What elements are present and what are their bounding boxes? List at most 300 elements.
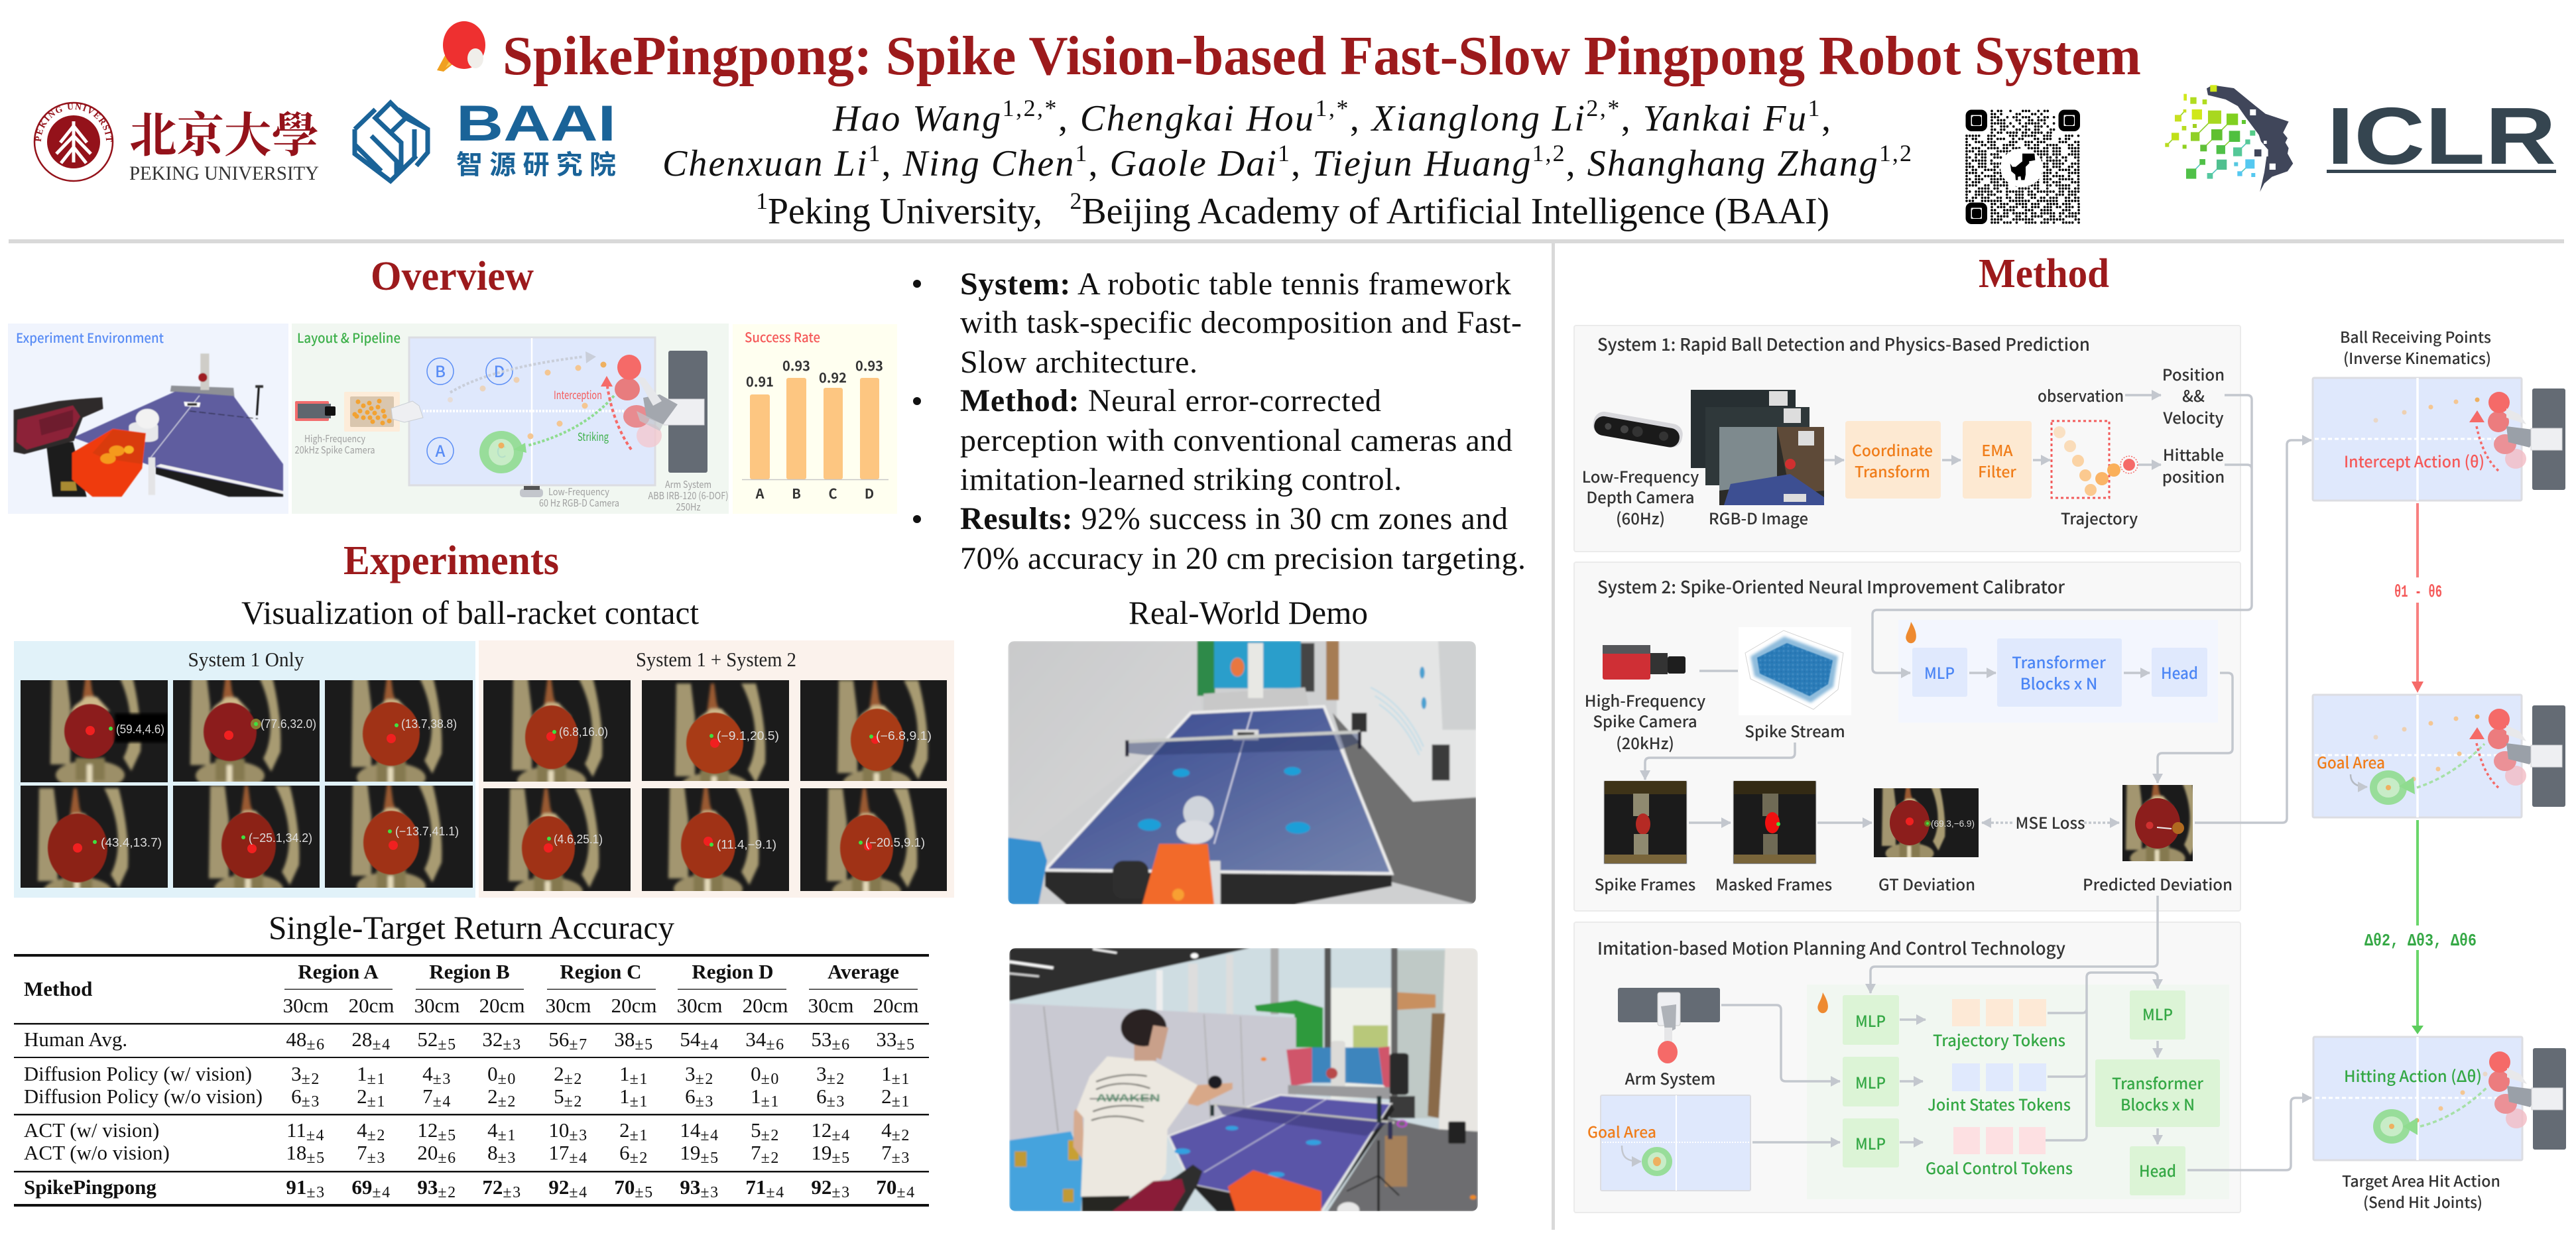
- MSE loss: MSE Loss: [2015, 810, 2085, 833]
- row: Diffusion Policy w/ vision: 1: [881, 1062, 892, 1085]
- row: Diffusion Policy w/ vision: 1: [357, 1062, 367, 1085]
- row: ACT w/ vision: [24, 1118, 910, 1144]
- heading: Real-World Demo: Real-World Demo: [1129, 594, 1368, 631]
- box: coordinate transform: Coordinate: [1852, 438, 1933, 461]
- authors: ,: [1350, 98, 1370, 139]
- row: ACT w/ vision: 10: [548, 1118, 569, 1142]
- row: ACT w/ vision: 4: [357, 1118, 367, 1142]
- system 2 labels: (20kHz): [1616, 731, 1674, 754]
- label: target area hit action: [2342, 1169, 2500, 1213]
- panel: experiment environment: Experiment Environment: [16, 328, 164, 347]
- box: EMA filter: [1963, 421, 2032, 499]
- panel: success rate bar chart: [733, 324, 897, 514]
- layout labels: 250Hz: [676, 500, 700, 514]
- trajectory: Trajectory: [2061, 506, 2138, 529]
- row: SpikePingpong: ±3: [306, 1184, 326, 1201]
- masked frames: [1733, 781, 1816, 864]
- frame labels: Spike Frames: [1595, 872, 1695, 895]
- row: Diffusion Policy w/ vision: Diffusion Policy (w/ vision): [24, 1062, 252, 1085]
- row: Diffusion Policy w/o vision: ±1: [892, 1093, 910, 1110]
- authors: Chengkai Hou: [1080, 98, 1314, 139]
- predicted deviation: [2122, 776, 2198, 870]
- panel: hitting action: [2313, 1037, 2566, 1160]
- row: SpikePingpong: 92: [811, 1175, 831, 1199]
- layout labels: Arm System: [665, 477, 711, 491]
- contact image 10: [483, 788, 631, 906]
- authors: [662, 95, 1912, 184]
- table header: Method: [24, 977, 92, 1000]
- trainable green block: Head: [2139, 1158, 2176, 1181]
- row: Diffusion Policy w/ vision: [24, 1062, 910, 1088]
- contact image 8: (−9.1,20.5): [717, 729, 779, 743]
- spike stream cube: [1739, 627, 1851, 715]
- row: Human Avg.: ±6: [306, 1036, 326, 1053]
- row: Diffusion Policy w/ vision: ±1: [367, 1071, 386, 1088]
- contact image 1: [21, 672, 168, 790]
- trainable network block: Transformer: [2012, 650, 2106, 673]
- affiliations: Beijing Academy of Artificial Intelligence (BAAI): [1081, 191, 1829, 232]
- table header: 20cm: [611, 994, 656, 1017]
- contact image 4: (43.4,13.7): [101, 836, 162, 849]
- box: EMA filter: Filter: [1978, 459, 2016, 482]
- authors: Yankai Fu: [1643, 98, 1806, 139]
- row: ACT w/o vision: ±3: [367, 1150, 386, 1167]
- row: ACT w/o vision: 18: [286, 1141, 306, 1164]
- row: ACT w/ vision: 12: [417, 1118, 438, 1142]
- connectors: [1645, 671, 2233, 783]
- layout labels: High-Frequency: [304, 432, 365, 446]
- table header: Region C: [560, 960, 642, 983]
- contact image 2: (77.6,32.0): [261, 717, 316, 731]
- photo: person playing: AWAKEN: [1096, 1093, 1160, 1104]
- table header: 30cm: [283, 994, 328, 1017]
- row: Diffusion Policy w/ vision: 3: [816, 1062, 827, 1085]
- icon: depth camera: [1591, 410, 1684, 449]
- row: Diffusion Policy w/o vision: ±3: [827, 1093, 845, 1110]
- system 2 labels: [1585, 688, 1845, 754]
- row: Human Avg.: ±3: [503, 1036, 522, 1053]
- layout labels: Striking: [578, 428, 609, 444]
- icon: ping pong paddle: [437, 21, 485, 72]
- results table: [14, 954, 929, 1207]
- outputs: [2038, 362, 2225, 487]
- row: Diffusion Policy w/o vision: ±2: [498, 1093, 517, 1110]
- row: SpikePingpong: ±4: [372, 1184, 391, 1201]
- connectors: [1721, 896, 2158, 1142]
- row: ACT w/o vision: ±3: [892, 1150, 910, 1167]
- trajectory: [2052, 421, 2138, 529]
- row: Diffusion Policy w/o vision: 7: [422, 1085, 433, 1108]
- row: Diffusion Policy w/ vision: ±3: [433, 1071, 452, 1088]
- subheading: visualization: Visualization of ball-racket contact: [241, 594, 699, 631]
- goal area diagram: [1587, 1095, 1750, 1191]
- row: Diffusion Policy w/o vision: 1: [751, 1085, 761, 1108]
- trainable green block: [1807, 973, 2229, 1199]
- row: SpikePingpong: 69: [351, 1175, 372, 1199]
- panel: imitation-based motion planning: Imitation-based Motion Planning And Control Technology: [1597, 935, 2065, 960]
- contact image 3: [325, 674, 473, 792]
- label: ball receiving points: Ball Receiving Points: [2340, 325, 2491, 347]
- row: Human Avg.: [24, 1028, 916, 1053]
- row: Diffusion Policy w/ vision: ±2: [302, 1071, 320, 1088]
- affiliations: Peking University,: [768, 191, 1070, 232]
- row: Human Avg.: ±7: [569, 1036, 588, 1053]
- row: SpikePingpong: ±2: [438, 1184, 457, 1201]
- row: ACT w/o vision: 19: [680, 1141, 700, 1164]
- row: Diffusion Policy w/o vision: 2: [487, 1085, 498, 1108]
- frame labels: Predicted Deviation: [2083, 872, 2233, 895]
- arrow: delta thetas: Δθ2, Δθ3, Δθ6: [2364, 931, 2477, 951]
- row: SpikePingpong: 72: [482, 1175, 503, 1199]
- outputs: &&: [2182, 383, 2205, 406]
- arm system icon: Arm System: [1625, 1066, 1715, 1089]
- frame arrows: [1689, 821, 1872, 824]
- row: Human Avg.: 48: [286, 1028, 306, 1051]
- row: ACT w/ vision: ±1: [630, 1127, 648, 1144]
- column divider: [1552, 243, 1555, 1230]
- label: ball receiving points: [2340, 325, 2491, 369]
- row: ACT w/ vision: ±4: [831, 1127, 851, 1144]
- panel: System 1 + System 2: [479, 640, 954, 906]
- row: Human Avg.: ±6: [766, 1036, 785, 1053]
- row: Diffusion Policy w/o vision: ±4: [433, 1093, 452, 1110]
- table header: 30cm: [677, 994, 722, 1017]
- authors: ,: [882, 143, 902, 184]
- row: ACT w/ vision: 14: [680, 1118, 700, 1142]
- row: Diffusion Policy w/o vision: Diffusion Policy (w/o vision): [24, 1085, 263, 1108]
- row: Diffusion Policy w/ vision: 2: [554, 1062, 564, 1085]
- row: ACT w/o vision: ±2: [761, 1150, 780, 1167]
- outputs: observation: [2038, 383, 2124, 406]
- panel: success rate bar chart: B: [792, 483, 801, 503]
- table header: Region D: [692, 960, 774, 983]
- heading: Method: Method: [1979, 251, 2109, 296]
- contact image 8: [642, 680, 789, 802]
- contact image 11: [642, 786, 789, 904]
- panel: success rate bar chart: 0.92: [819, 367, 847, 387]
- layout labels: ABB IRB-120 (6-DOF): [648, 489, 728, 503]
- GT deviation: (69.3,−6.9): [1931, 818, 1975, 829]
- row: Diffusion Policy w/o vision: 2: [881, 1085, 892, 1108]
- QR code: [1967, 111, 2079, 223]
- panel: success rate bar chart: A: [755, 483, 765, 503]
- panel: goal area: [2313, 695, 2565, 817]
- summary bullets: Results: 92% success in 30 cm zones and: [960, 501, 1508, 536]
- system 2 labels: Spike Camera: [1593, 709, 1697, 732]
- row: SpikePingpong: ±3: [831, 1184, 851, 1201]
- row: SpikePingpong: 70: [614, 1175, 635, 1199]
- authors: ,: [1566, 143, 1586, 184]
- row: ACT w/o vision: ±4: [569, 1150, 588, 1167]
- row: ACT w/o vision: ±6: [438, 1150, 457, 1167]
- row: ACT w/o vision: 7: [357, 1141, 367, 1164]
- row: ACT w/ vision: 4: [487, 1118, 498, 1142]
- camera labels: Low-Frequency: [1582, 464, 1699, 487]
- table header: Region B: [429, 960, 510, 983]
- logo: BAAI: 智源研究院: [456, 143, 616, 182]
- panel: goal area: Goal Area: [2317, 750, 2385, 773]
- authors: 1,2: [1532, 140, 1565, 166]
- table header: 20cm: [479, 994, 524, 1017]
- panel: success rate bar chart: 0.91: [746, 371, 774, 390]
- row: Diffusion Policy w/o vision: 2: [357, 1085, 367, 1108]
- row: ACT w/o vision: 7: [751, 1141, 761, 1164]
- authors: 1,2,*: [1003, 95, 1057, 121]
- row: SpikePingpong: [24, 1175, 916, 1201]
- table diagram: [409, 337, 655, 485]
- label: target area hit action: (Send Hit Joints): [2363, 1190, 2483, 1213]
- row: Diffusion Policy w/ vision: 3: [291, 1062, 302, 1085]
- RGB-D image stack: [1691, 390, 1824, 505]
- row: Human Avg.: Human Avg.: [24, 1028, 127, 1051]
- row: Diffusion Policy w/o vision: 6: [816, 1085, 827, 1108]
- frame labels: GT Deviation: [1878, 872, 1975, 895]
- panel: success rate bar chart: C: [828, 483, 837, 503]
- row: Diffusion Policy w/ vision: 0: [751, 1062, 761, 1085]
- row: ACT w/ vision: ±1: [498, 1127, 517, 1144]
- trainable green block: MLP: [2142, 1002, 2173, 1025]
- arrows: [1824, 395, 2161, 465]
- row: ACT w/o vision: [24, 1141, 910, 1167]
- table header: 30cm: [546, 994, 591, 1017]
- panel: System 1: [1574, 326, 2240, 552]
- row: Human Avg.: 52: [417, 1028, 438, 1051]
- row: Human Avg.: ±5: [896, 1036, 916, 1053]
- row: ACT w/o vision: 19: [811, 1141, 831, 1164]
- heading: Experiments: Experiments: [343, 538, 559, 583]
- panel: intercept action: Intercept Action (θ): [2344, 449, 2484, 472]
- trainable green block: Blocks x N: [2120, 1092, 2195, 1115]
- spike camera: [295, 392, 423, 432]
- row: Human Avg.: 34: [745, 1028, 766, 1051]
- row: SpikePingpong: ±4: [569, 1184, 588, 1201]
- trainable green block: MLP: [1855, 1131, 1886, 1154]
- row: Human Avg.: 28: [351, 1028, 372, 1051]
- box: EMA filter: EMA: [1981, 438, 2013, 461]
- row: SpikePingpong: 93: [417, 1175, 438, 1199]
- contact image 1: (59.4,4.6): [116, 723, 164, 736]
- row: Human Avg.: ±4: [700, 1036, 719, 1053]
- row: Diffusion Policy w/o vision: 6: [291, 1085, 302, 1108]
- row: Diffusion Policy w/ vision: ±2: [827, 1071, 845, 1088]
- row: ACT w/o vision: 8: [487, 1141, 498, 1164]
- row: Diffusion Policy w/ vision: 1: [619, 1062, 630, 1085]
- authors: 1: [1278, 140, 1290, 166]
- layout labels: 60 Hz RGB-D Camera: [539, 496, 619, 510]
- outputs: Velocity: [2162, 405, 2224, 428]
- row: Diffusion Policy w/ vision: ±1: [630, 1071, 648, 1088]
- summary bullets: Method: Neural error-corrected: [960, 383, 1381, 418]
- panel: System 1 Only: System 1 Only: [188, 648, 304, 671]
- row: ACT w/ vision: ACT (w/ vision): [24, 1118, 159, 1142]
- authors: ,: [1821, 98, 1831, 139]
- contact image 10: (4.6,25.1): [554, 833, 603, 846]
- box: coordinate transform: Transform: [1855, 459, 1930, 482]
- panel: success rate bar chart: Success Rate: [745, 327, 820, 346]
- row: Diffusion Policy w/ vision: ±1: [892, 1071, 910, 1088]
- row: Diffusion Policy w/ vision: ±0: [761, 1071, 780, 1088]
- layout labels: Low-Frequency: [548, 485, 609, 499]
- connector: predicted deviation to receiving points: [2195, 440, 2311, 823]
- row: SpikePingpong: 93: [680, 1175, 700, 1199]
- title: SpikePingpong: Spike Vision-based Fast-Slow Pingpong Robot System: [503, 25, 2141, 87]
- row: Diffusion Policy w/o vision: ±3: [302, 1093, 320, 1110]
- row: SpikePingpong: 92: [548, 1175, 569, 1199]
- authors: 1: [868, 140, 880, 166]
- frame labels: [1595, 872, 2233, 895]
- row: SpikePingpong: ±4: [766, 1184, 785, 1201]
- authors: Gaole Dai: [1110, 143, 1276, 184]
- row: SpikePingpong: ±3: [700, 1184, 719, 1201]
- row: Human Avg.: 56: [548, 1028, 569, 1051]
- arrow: theta 1-6: θ1 - θ6: [2394, 582, 2442, 602]
- system 2 labels: Spike Stream: [1745, 719, 1845, 742]
- table diagram: A: [436, 438, 446, 461]
- trainable network block: MLP: [1924, 660, 1955, 684]
- camera labels: Depth Camera: [1586, 485, 1695, 508]
- trainable green block: MLP: [1855, 1008, 1886, 1032]
- box: coordinate transform: [1845, 421, 1941, 499]
- panel: intercept action: [2313, 378, 2565, 501]
- contact image 6: (−13.7,41.1): [395, 825, 459, 838]
- table header: 20cm: [743, 994, 788, 1017]
- panel: layout and pipeline: Layout & Pipeline: [297, 328, 400, 347]
- contact image 6: [325, 783, 473, 901]
- row: Diffusion Policy w/o vision: ±1: [761, 1093, 780, 1110]
- summary bullets: [913, 267, 1526, 576]
- trainable network block: Head: [2161, 660, 2198, 684]
- row: ACT w/o vision: 17: [548, 1141, 569, 1164]
- affiliations: 1: [756, 188, 768, 214]
- summary bullets: 70% accuracy in 20 cm precision targeting.: [960, 541, 1526, 576]
- table header: 30cm: [808, 994, 853, 1017]
- table diagram: B: [435, 359, 446, 382]
- authors: 1: [1808, 95, 1820, 121]
- layout labels: 20kHz Spike Camera: [294, 443, 375, 457]
- row: ACT w/o vision: ±3: [498, 1150, 517, 1167]
- authors: ,: [1621, 98, 1641, 139]
- contact image 11: (11.4,−9.1): [717, 838, 776, 851]
- row: ACT w/ vision: ±5: [438, 1127, 457, 1144]
- panel: success rate bar chart: 0.93: [782, 355, 810, 375]
- frame labels: Masked Frames: [1715, 872, 1832, 895]
- label: target area hit action: Target Area Hit Action: [2342, 1169, 2500, 1191]
- trainable green block: Joint States Tokens: [1928, 1092, 2071, 1115]
- authors: 1,*: [1316, 95, 1348, 121]
- connector: outputs to System 2: [1872, 395, 2252, 673]
- row: Human Avg.: ±6: [831, 1036, 851, 1053]
- logo: ICLR: ICLR: [2327, 91, 2556, 181]
- panel: hitting action: Hitting Action (Δθ): [2344, 1063, 2482, 1087]
- row: ACT w/o vision: ±2: [630, 1150, 648, 1167]
- outputs: Hittable: [2163, 442, 2224, 465]
- row: ACT w/o vision: ±5: [700, 1150, 719, 1167]
- authors: Hao Wang: [833, 98, 1001, 139]
- contact image 5: [173, 786, 320, 904]
- row: Diffusion Policy w/o vision: ±3: [696, 1093, 714, 1110]
- system 2 labels: High-Frequency: [1585, 688, 1705, 711]
- panel: success rate bar chart: D: [865, 483, 874, 503]
- logo: BAAI: BAAI: [456, 95, 616, 152]
- contact image 9: [800, 680, 947, 798]
- photo: person playing: [1009, 948, 1478, 1218]
- row: SpikePingpong: SpikePingpong: [24, 1175, 156, 1199]
- row: Diffusion Policy w/ vision: ±2: [564, 1071, 583, 1088]
- header divider: [9, 239, 2564, 243]
- table header: [24, 960, 918, 1017]
- row: ACT w/ vision: 2: [619, 1118, 630, 1142]
- authors: Chenxuan Li: [662, 143, 867, 184]
- panel: System 2: System 2: Spike-Oriented Neural Improvement Calibrator: [1597, 574, 2065, 599]
- row: ACT w/o vision: ±5: [306, 1150, 326, 1167]
- row: ACT w/ vision: ±2: [892, 1127, 910, 1144]
- trainable network block: [1898, 620, 2218, 723]
- logo: Peking University: PEKING UNIVERSITY: [129, 162, 319, 184]
- heading: table title: Single-Target Return Accuracy: [269, 909, 674, 946]
- label: ball receiving points: (Inverse Kinematics): [2343, 346, 2491, 369]
- row: Human Avg.: ±5: [635, 1036, 654, 1053]
- logo: Peking University: 1898: [86, 164, 88, 166]
- row: Human Avg.: 32: [482, 1028, 503, 1051]
- panel: System 2: [1574, 562, 2240, 911]
- authors: 1: [1075, 140, 1087, 166]
- heading: Overview: Overview: [371, 254, 534, 299]
- row: ACT w/ vision: 12: [811, 1118, 831, 1142]
- table diagram: C: [496, 439, 507, 462]
- camera labels: [1582, 464, 1808, 529]
- row: Human Avg.: 33: [876, 1028, 896, 1051]
- row: ACT w/ vision: ±4: [700, 1127, 719, 1144]
- row: SpikePingpong: ±4: [896, 1184, 916, 1201]
- panel: experiment environment: [8, 324, 288, 514]
- trainable green block: Trajectory Tokens: [1933, 1028, 2065, 1051]
- panel: System 1 Only: [14, 641, 475, 906]
- icon: spike camera: [1603, 645, 1686, 680]
- contact image 5: (−25.1,34.2): [249, 831, 312, 845]
- panel: success rate bar chart: 0.93: [855, 355, 883, 375]
- row: ACT w/o vision: 7: [881, 1141, 892, 1164]
- row: Human Avg.: 54: [680, 1028, 700, 1051]
- row: Diffusion Policy w/ vision: 0: [487, 1062, 498, 1085]
- affiliations: 2: [1070, 188, 1082, 214]
- camera labels: RGB-D Image: [1709, 506, 1808, 529]
- photo: robot view of table: [1008, 641, 1477, 904]
- connector: head to hit action: [2187, 1098, 2311, 1170]
- row: Human Avg.: ±4: [372, 1036, 391, 1053]
- summary bullets: System: A robotic table tennis framework: [960, 267, 1511, 302]
- contact image 9: (−6.8,9.1): [876, 729, 932, 743]
- table header: 30cm: [414, 994, 460, 1017]
- row: Human Avg.: ±5: [438, 1036, 457, 1053]
- table header: Average: [828, 960, 899, 983]
- row: SpikePingpong: 91: [286, 1175, 306, 1199]
- row: SpikePingpong: ±3: [503, 1184, 522, 1201]
- row: Diffusion Policy w/ vision: ±2: [696, 1071, 714, 1088]
- row: Diffusion Policy w/ vision: 3: [685, 1062, 696, 1085]
- contact image 3: (13.7,38.8): [401, 717, 457, 731]
- spike frames: [1604, 781, 1687, 864]
- row: Diffusion Policy w/ vision: 4: [422, 1062, 433, 1085]
- authors: Ning Chen: [903, 143, 1073, 184]
- row: SpikePingpong: 71: [745, 1175, 766, 1199]
- trainable green block: Goal Control Tokens: [1926, 1156, 2073, 1179]
- summary bullets: with task-specific decomposition and Fast-: [960, 305, 1522, 340]
- contact image 12: (−20.5,9.1): [865, 836, 925, 849]
- authors: ,: [1291, 143, 1311, 184]
- logo: ICLR: [2165, 85, 2556, 192]
- authors: 2,*: [1586, 95, 1619, 121]
- row: Diffusion Policy w/o vision: [24, 1085, 910, 1110]
